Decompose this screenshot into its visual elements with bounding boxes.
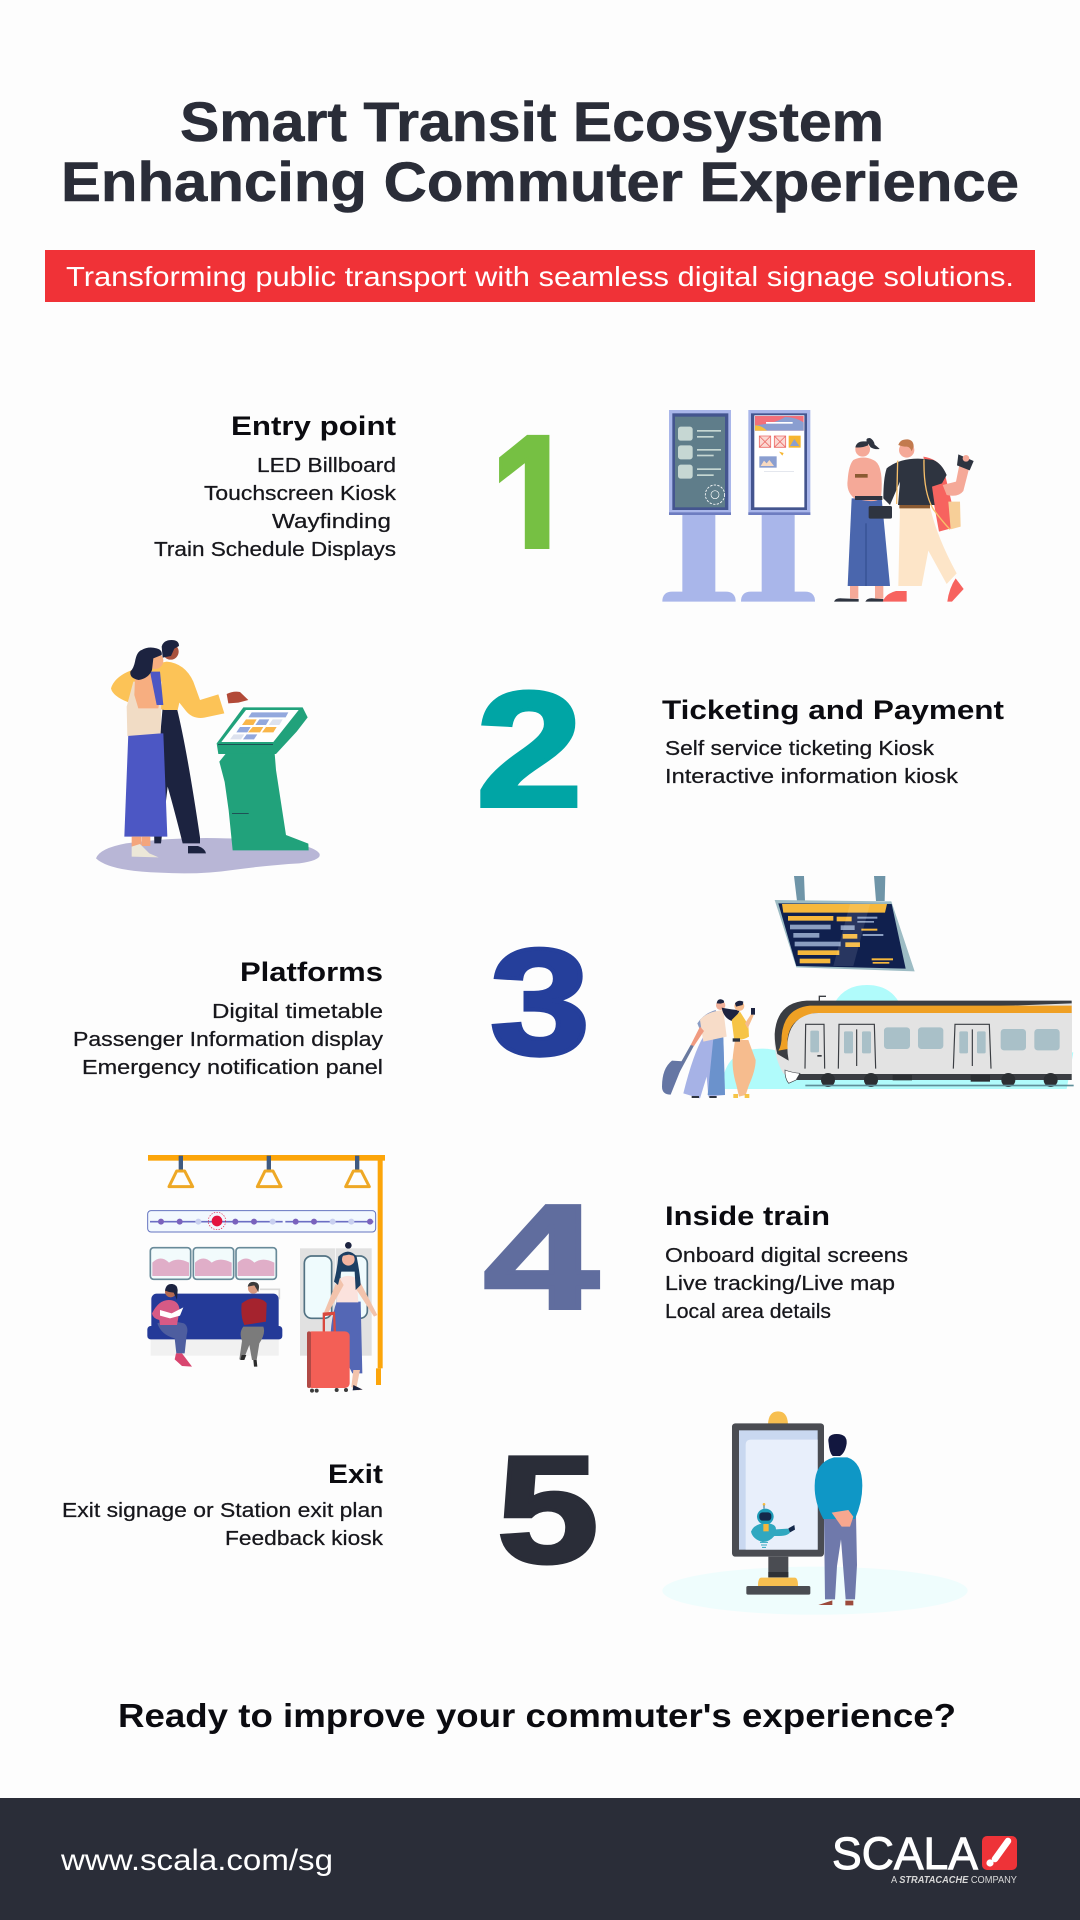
step 3 text: platforms: Emergency notification panel: [82, 1057, 383, 1079]
step 3 text: platforms: [73, 957, 383, 1079]
number 1: 1: [490, 395, 577, 613]
icon: train windows: [150, 1248, 276, 1279]
step 2 text: ticketing and payment: Ticketing and Payment: [662, 695, 1004, 725]
icon: doors and standing woman with suitcase: [300, 1242, 377, 1393]
number 2: 2: [476, 657, 583, 841]
step 4 text: inside train: Inside train: [665, 1201, 830, 1231]
number 4: 4: [484, 1174, 598, 1339]
website url: www.scala.com/sg: [60, 1844, 333, 1877]
step 1 text: entry point: Wayfinding: [272, 511, 391, 533]
illustration: touchscreen kiosks and couple: [662, 410, 974, 602]
step 1 text: entry point: LED Billboard: [257, 455, 396, 477]
icon: seated passengers on blue bench: [147, 1282, 282, 1367]
icon: woman with tote bag: [124, 647, 167, 857]
step 1 text: entry point: Touchscreen Kiosk: [204, 483, 397, 505]
step 5 text: exit: Feedback kiosk: [225, 1528, 384, 1550]
cyan backdrop: [722, 985, 1073, 1089]
step 3 text: platforms: Passenger Information display: [73, 1029, 383, 1051]
step 2 text: ticketing and payment: [662, 695, 1004, 788]
number 5: 5: [497, 1424, 598, 1595]
icon: commuters with suitcase: [662, 999, 756, 1098]
step 2 text: ticketing and payment: Self service ticketing Kiosk: [665, 738, 935, 760]
step 3 text: platforms: Digital timetable: [212, 1001, 383, 1023]
step 1 text: entry point: [154, 411, 397, 561]
shadow: [96, 838, 320, 873]
footer bar: [0, 1798, 1080, 1920]
step 4 text: inside train: [665, 1201, 908, 1323]
step 1 text: entry point: Train Schedule Displays: [154, 539, 396, 561]
step 4 text: inside train: Live tracking/Live map: [665, 1273, 895, 1295]
call to action: Ready to improve your commuter's experience?: [118, 1697, 956, 1734]
step 5 text: exit: Exit signage or Station exit plan: [62, 1500, 383, 1522]
title: Enhancing Commuter Experience: [61, 150, 1019, 213]
logo: scala: A STRATACACHE COMPANY: [891, 1875, 1017, 1886]
step 4 text: inside train: Local area details: [665, 1301, 831, 1323]
step 1 text: entry point: Entry point: [231, 411, 396, 441]
icon: man with backpack: [883, 439, 974, 602]
icon: departures board: [775, 876, 915, 971]
logo: scala: SCALA: [832, 1828, 978, 1879]
ground ellipse: [662, 1567, 968, 1615]
step 4 text: inside train: Onboard digital screens: [665, 1245, 908, 1267]
step 5 text: exit: [62, 1459, 384, 1550]
icon: kiosk left: [662, 410, 736, 602]
icon: woman with bag: [834, 438, 892, 602]
icon: man pointing at kiosk: [111, 640, 248, 853]
icon: robot: [751, 1503, 795, 1547]
icon: kiosk right: [741, 410, 815, 602]
title: Smart Transit Ecosystem: [180, 90, 884, 153]
icon: train: [775, 996, 1074, 1087]
icon: grab rail: [148, 1155, 385, 1385]
illustration: platform train and departures board: [662, 876, 1074, 1098]
step 5 text: exit: Exit: [328, 1459, 383, 1489]
icon: man from behind: [815, 1434, 862, 1605]
subtitle banner: Transforming public transport with seamless digital signage solutions.: [66, 261, 1014, 292]
step 3 text: platforms: Platforms: [240, 957, 383, 987]
icon: ticket kiosk: [217, 707, 309, 850]
illustration: inside train: [147, 1155, 385, 1393]
icon: exit sign display: [732, 1411, 824, 1595]
illustration: couple at ticketing kiosk: [96, 640, 320, 873]
illustration: man at exit signage: [662, 1411, 968, 1615]
subtitle banner: [45, 250, 1035, 302]
step 2 text: ticketing and payment: Interactive information kiosk: [665, 766, 959, 788]
icon: route display: [148, 1211, 376, 1232]
title: [61, 90, 1019, 213]
number 3: 3: [490, 918, 590, 1087]
